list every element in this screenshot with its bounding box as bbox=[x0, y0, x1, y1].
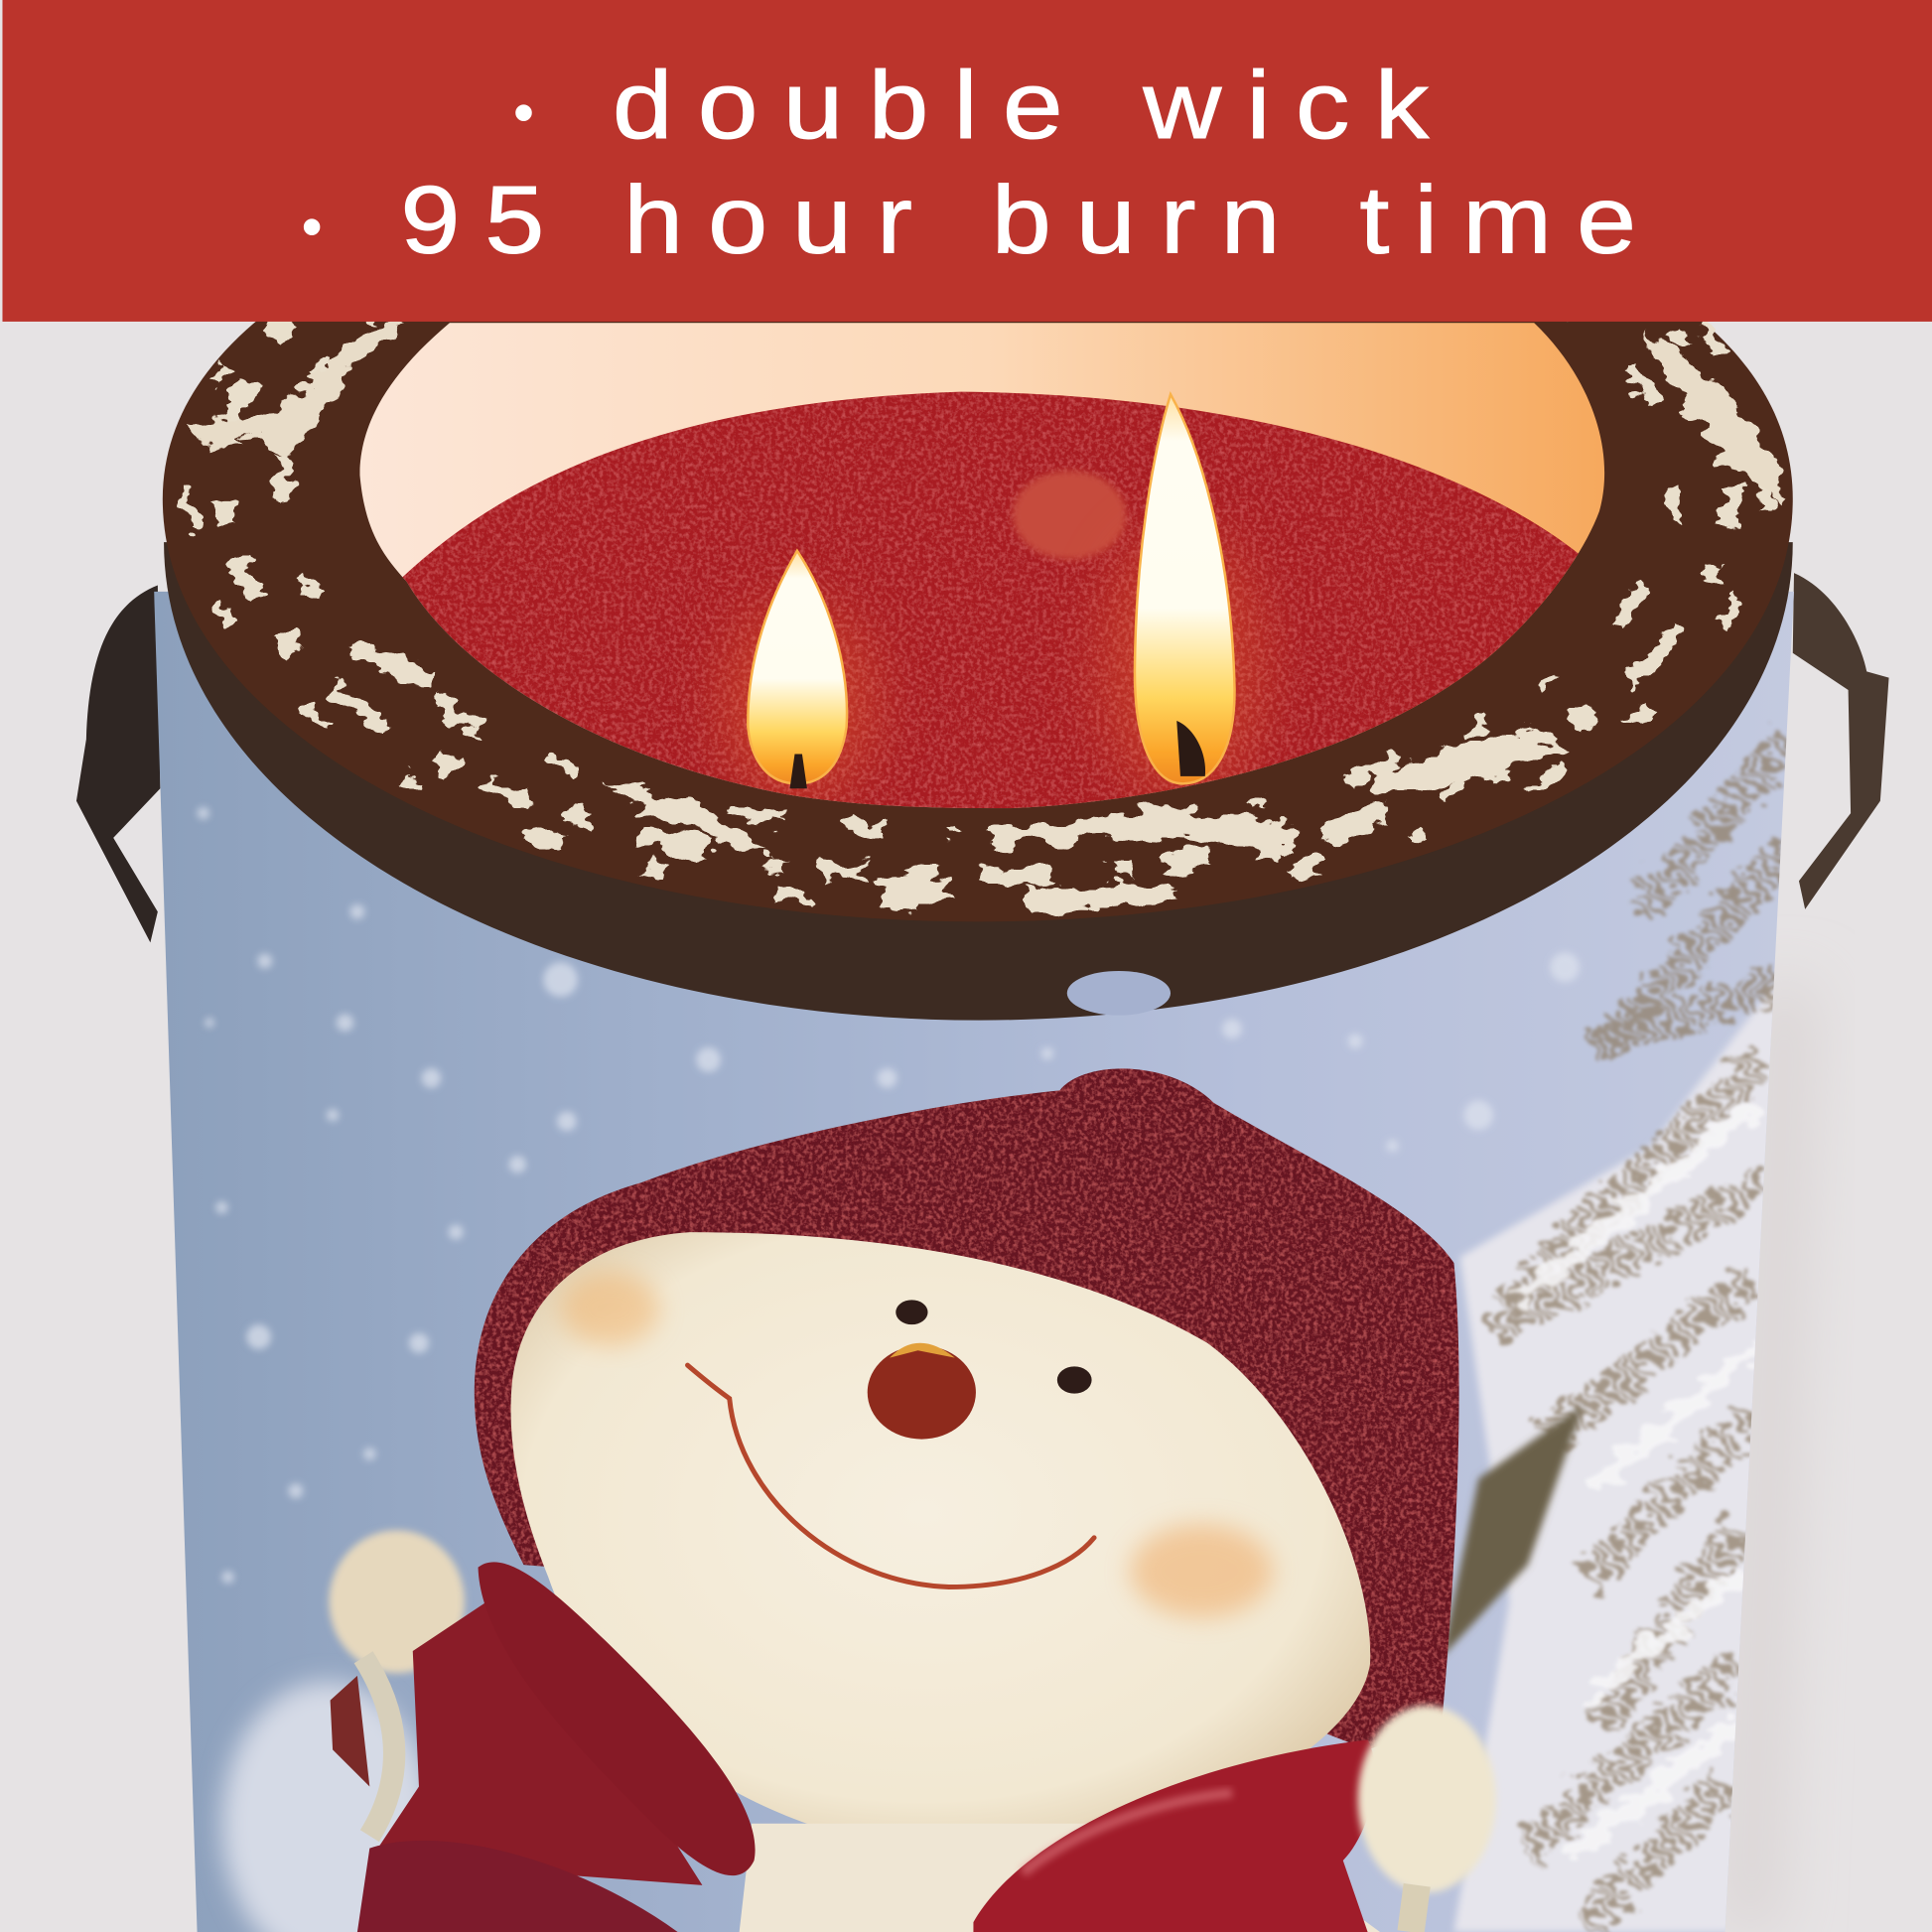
left mitten cuff bbox=[329, 1530, 465, 1673]
red banner bbox=[2, 0, 1932, 322]
top-left rim paint patch bbox=[191, 327, 407, 456]
nose bbox=[868, 1343, 976, 1440]
left handle bbox=[76, 586, 160, 942]
rope strap left bbox=[363, 1657, 394, 1836]
snowy ground bbox=[221, 1682, 431, 1932]
falling snow bbox=[198, 807, 1580, 1584]
inner opening bbox=[345, 148, 1626, 838]
can rim top surface bbox=[163, 296, 1793, 921]
cheek left bbox=[561, 1272, 659, 1345]
left arm bbox=[369, 1601, 702, 1885]
chipped cream paint on rim bbox=[189, 73, 1765, 906]
cheek right bbox=[1130, 1524, 1273, 1618]
snowman face bbox=[511, 1232, 1370, 1855]
right handle bbox=[1793, 573, 1889, 909]
rim rivet bbox=[1067, 971, 1171, 1016]
wax berry chunk bbox=[1013, 471, 1126, 559]
lower red coat bbox=[357, 1841, 678, 1932]
can rim lower band bbox=[164, 542, 1793, 1021]
rope strap right bbox=[1411, 1885, 1417, 1932]
dark sleeve patch bbox=[331, 1676, 369, 1787]
eye left bbox=[896, 1300, 928, 1324]
line one: double wick: double wick bbox=[613, 51, 1453, 159]
right flame bbox=[1135, 394, 1235, 783]
mitten left bbox=[479, 1562, 756, 1875]
line one: double wick: • bbox=[514, 81, 534, 145]
snowman hat bbox=[475, 1068, 1459, 1749]
front rim paint streaks bbox=[345, 640, 1571, 911]
right flame glow bbox=[1103, 530, 1263, 801]
top-right rim paint patch bbox=[1645, 333, 1780, 505]
can shadow bbox=[1725, 986, 1811, 1932]
banner text bbox=[302, 51, 1661, 273]
snowman bbox=[329, 1068, 1496, 1932]
snowy fir tree bbox=[1442, 740, 1811, 1932]
smile bbox=[688, 1365, 1094, 1587]
right mitten cuff bbox=[1358, 1706, 1496, 1892]
line two: burn time: • bbox=[302, 196, 322, 259]
right mitten bbox=[973, 1739, 1375, 1932]
body below face bbox=[740, 1824, 1380, 1932]
can body with label art bbox=[123, 567, 1849, 1932]
left flame bbox=[748, 551, 847, 788]
left flame glow bbox=[725, 604, 873, 801]
right mitten highlight bbox=[1023, 1793, 1232, 1872]
line two: burn time: 95 hour burn time bbox=[400, 165, 1661, 273]
red wax surface bbox=[400, 392, 1587, 838]
eye right bbox=[1057, 1366, 1092, 1394]
